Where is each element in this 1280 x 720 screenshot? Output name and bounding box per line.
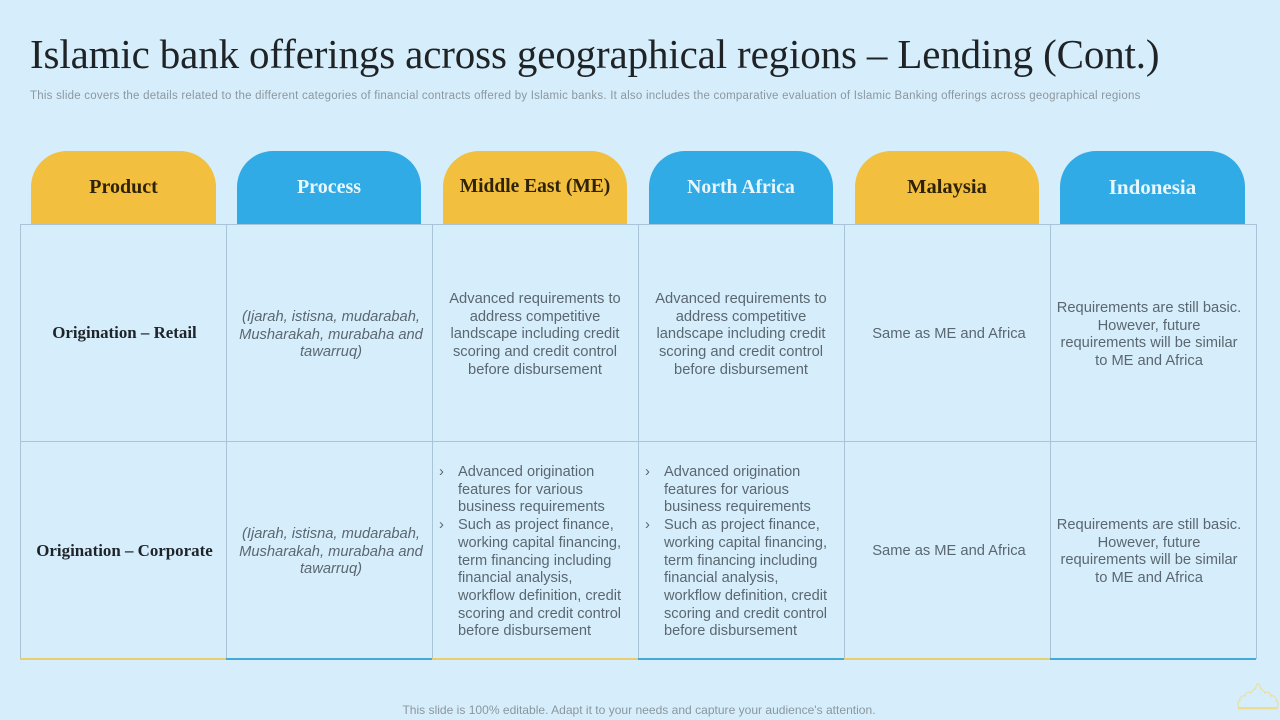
subtitle: This slide covers the details related to the different categories of financial contracts offered by Islamic banks. It also includes the comparative evaluation of Islamic Banking offerings across geographical regions — [30, 90, 1141, 102]
Malaysia cell: corporate: Same as ME and Africa — [872, 543, 1026, 559]
North Africa cell: retail: landscape including credit — [656, 326, 826, 342]
Middle East cell: corporate: › — [439, 517, 444, 533]
North Africa cell: retail: address competitive — [676, 309, 806, 325]
North Africa cell: retail: Advanced requirements to — [655, 291, 827, 307]
Middle East cell: retail: landscape including credit — [450, 326, 620, 342]
process cell: retail: tawarruq) — [300, 344, 362, 360]
icon: sun logo — [1237, 683, 1279, 710]
bullet text: before disbursement — [458, 623, 591, 639]
bullet text: Such as project finance, — [458, 517, 614, 533]
Middle East cell: retail — [449, 291, 621, 378]
North Africa cell: retail: before disbursement — [674, 362, 808, 378]
bullet text: working capital financing, — [664, 535, 827, 551]
bullet text: Advanced origination — [458, 464, 594, 480]
Middle East cell: retail: address competitive — [470, 309, 600, 325]
Middle East cell: retail: Advanced requirements to — [449, 291, 621, 307]
bullet text: features for various — [458, 482, 583, 498]
footer note: This slide is 100% editable. Adapt it to your needs and capture your audience's attention. — [402, 703, 876, 717]
Malaysia cell: retail: Same as ME and Africa — [872, 326, 1026, 342]
North Africa cell: retail — [655, 291, 827, 378]
bullet text: working capital financing, — [458, 535, 621, 551]
bullet text: scoring and credit control — [664, 606, 827, 622]
bullet text: scoring and credit control — [458, 606, 621, 622]
process cell: retail: Musharakah, murabaha and — [239, 327, 423, 343]
bullet text: business requirements — [664, 499, 811, 515]
header tab: North Africa — [649, 151, 833, 224]
North Africa cell: corporate — [645, 464, 827, 639]
row label: Origination Corporate: Origination – Corporate — [36, 541, 213, 560]
header tab: Product: Product — [89, 176, 158, 198]
process cell: corporate: tawarruq) — [300, 561, 362, 577]
header tab: Middle East — [443, 151, 627, 224]
Indonesia cell: retail: However, future — [1098, 318, 1200, 334]
process cell: retail — [239, 309, 424, 360]
header tab: Malaysia — [855, 151, 1039, 224]
title: Islamic bank offerings across geographical regions – Lending (Cont.) — [30, 31, 1159, 77]
header tab: Middle East: Middle East (ME) — [460, 176, 610, 197]
header tab: Process: Process — [297, 176, 361, 198]
bullet text: features for various — [664, 482, 789, 498]
header tab: Malaysia: Malaysia — [907, 176, 987, 198]
bullet text: workflow definition, credit — [458, 588, 621, 604]
header tab: Process — [237, 151, 421, 224]
bullet text: financial analysis, — [664, 570, 778, 586]
bullet: › — [439, 464, 444, 480]
header tab: Indonesia: Indonesia — [1109, 175, 1196, 199]
process cell: corporate: (Ijarah, istisna, mudarabah, — [242, 526, 420, 542]
bullet text: Advanced origination — [664, 464, 800, 480]
bullet text: financial analysis, — [458, 570, 572, 586]
Indonesia cell: corporate: to ME and Africa — [1095, 570, 1203, 586]
bullet text: business requirements — [458, 499, 605, 515]
Indonesia cell: corporate: requirements will be similar — [1060, 552, 1238, 568]
bullet text: Such as project finance, — [664, 517, 820, 533]
bullet text: before disbursement — [664, 623, 797, 639]
bullet text: workflow definition, credit — [664, 588, 827, 604]
bullet text — [458, 464, 621, 639]
Indonesia cell: retail — [1057, 300, 1241, 369]
bullet: › — [645, 464, 650, 480]
Middle East cell: corporate — [439, 464, 621, 639]
Indonesia cell: retail: Requirements are still basic. — [1057, 300, 1241, 316]
bullet text: term financing including — [458, 553, 611, 569]
process cell: corporate: Musharakah, murabaha and — [239, 544, 423, 560]
North Africa cell: corporate: › — [645, 517, 650, 533]
Indonesia cell: retail: to ME and Africa — [1095, 353, 1203, 369]
header tab: Indonesia — [1060, 151, 1245, 224]
Middle East cell: retail: scoring and credit control — [453, 344, 617, 360]
header tab: Product — [31, 151, 216, 224]
Indonesia cell: retail: requirements will be similar — [1060, 335, 1238, 351]
row label: Origination Retail: Origination – Retail — [52, 323, 197, 342]
North Africa cell: retail: scoring and credit control — [659, 344, 823, 360]
Indonesia cell: corporate: However, future — [1098, 535, 1200, 551]
process cell: corporate — [239, 526, 424, 577]
process cell: retail: (Ijarah, istisna, mudarabah, — [242, 309, 420, 325]
bullet text: term financing including — [664, 553, 817, 569]
Indonesia cell: corporate: Requirements are still basic. — [1057, 517, 1241, 533]
bullet text — [664, 464, 827, 639]
Indonesia cell: corporate — [1057, 517, 1241, 586]
Middle East cell: retail: before disbursement — [468, 362, 602, 378]
header tab: North Africa: North Africa — [687, 176, 795, 198]
